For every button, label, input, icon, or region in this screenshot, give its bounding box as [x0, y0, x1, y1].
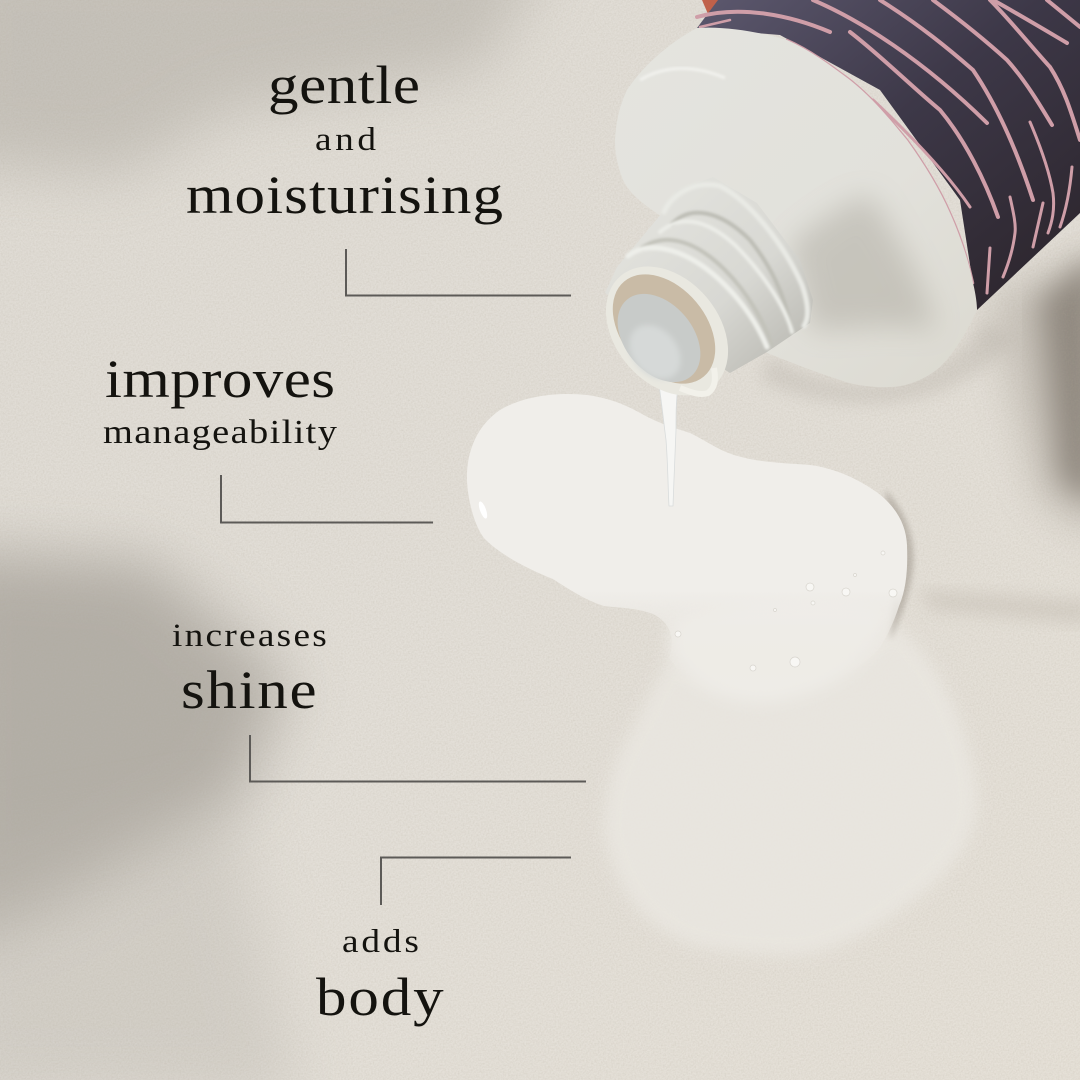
bottle: dark patterned body: [697, 0, 1080, 310]
callout: increases shine: shine: [181, 661, 317, 720]
callout: gentle and moisturising: gentle: [268, 56, 420, 115]
puddle: highlight: [477, 501, 489, 519]
bottle: orange tip: [702, 0, 722, 14]
callout: gentle and moisturising: [186, 56, 571, 296]
callout: gentle and moisturising: and: [315, 121, 376, 157]
callout: adds body: body: [316, 968, 444, 1027]
bottle: white shoulder cap: [615, 28, 977, 387]
bottle: shoulder shading: [790, 195, 935, 330]
soap puddle: [467, 385, 977, 955]
puddle: bubbles: [675, 551, 897, 671]
bottle: neck collar: [664, 185, 808, 326]
bottle: [581, 0, 1080, 420]
callout: improves manageability: [103, 350, 433, 522]
bottle: threaded neck: [605, 177, 813, 373]
callout: gentle and moisturising: moisturising: [186, 166, 503, 225]
callout: improves manageability: improves: [105, 350, 335, 409]
puddle: main body: [467, 394, 907, 700]
puddle: thin outer spread: [604, 624, 977, 955]
puddle: lower soft lobe: [668, 599, 890, 702]
callout: adds body: [316, 858, 571, 1027]
callout: increases shine: increases: [172, 617, 327, 653]
puddle: stream from nozzle: [659, 385, 678, 506]
bottle: nozzle opening: [581, 242, 753, 420]
puddle: edge shadow: [885, 490, 913, 640]
callout: increases shine: [172, 617, 586, 782]
bottle: shoulder highlight: [640, 68, 725, 80]
bottle shadow: [760, 320, 1010, 403]
callout: improves manageability: manageability: [103, 413, 337, 450]
callout: adds body: adds: [342, 923, 419, 959]
